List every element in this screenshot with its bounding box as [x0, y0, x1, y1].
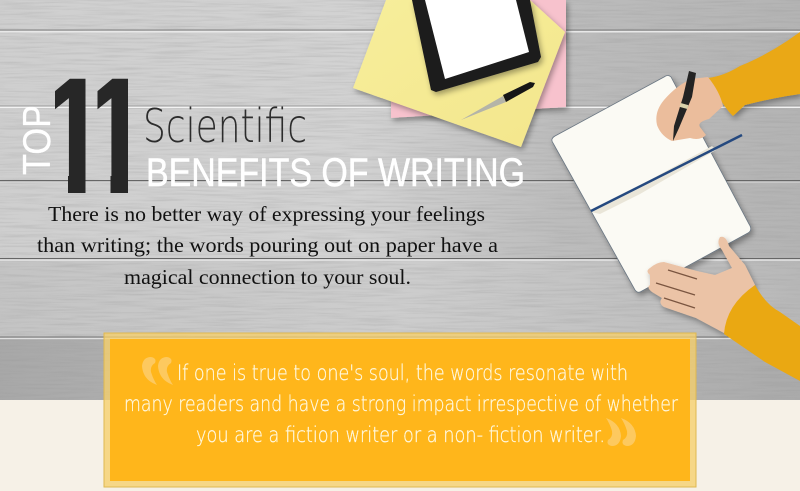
lower sleeve: [724, 285, 800, 381]
closing quote mark: [606, 418, 636, 446]
ribbon bookmark: [591, 135, 742, 211]
quote text: you are a fiction writer or a non- fiction writer.: [196, 423, 605, 447]
opening quote mark: [142, 357, 173, 385]
resting hand with sleeve: [648, 237, 800, 381]
numeral 11: 1: [39, 42, 111, 229]
tablet: [412, 0, 541, 92]
writing hand with sleeve: [656, 32, 800, 141]
lower hand: [648, 237, 755, 333]
quote text: If one is true to one's soul, the words resonate with: [177, 361, 628, 385]
quote text: many readers and have a strong impact irrespective of whether: [124, 392, 678, 416]
pen: [461, 82, 535, 120]
stationery: sticky notes, tablet and pen: [353, 0, 566, 147]
quote text: [124, 361, 678, 447]
numeral 11: 1: [81, 42, 153, 229]
upper hand: [656, 77, 723, 141]
pen in hand: [673, 71, 696, 141]
upper sleeve: [708, 32, 800, 116]
pink sticky note: [391, 0, 566, 118]
intro paragraph: than writing; the words pouring out on paper have a: [37, 233, 498, 257]
finger creases: [656, 270, 697, 308]
intro paragraph: magical connection to your soul.: [124, 265, 411, 289]
title: [22, 78, 523, 193]
intro paragraph: There is no better way of expressing your feelings: [48, 202, 485, 226]
yellow sticky note: [353, 0, 565, 147]
cream footer band: [0, 400, 800, 491]
Scientific script word: Scientific: [143, 99, 307, 153]
TOP rotated label: TOP: [16, 105, 59, 175]
quote callout panel: [104, 333, 696, 487]
BENEFITS OF WRITING: BENEFITS OF WRITING: [146, 151, 525, 195]
numeral 11: [55, 78, 128, 193]
notebook with ribbon: [552, 76, 751, 292]
intro paragraph: [37, 202, 498, 289]
